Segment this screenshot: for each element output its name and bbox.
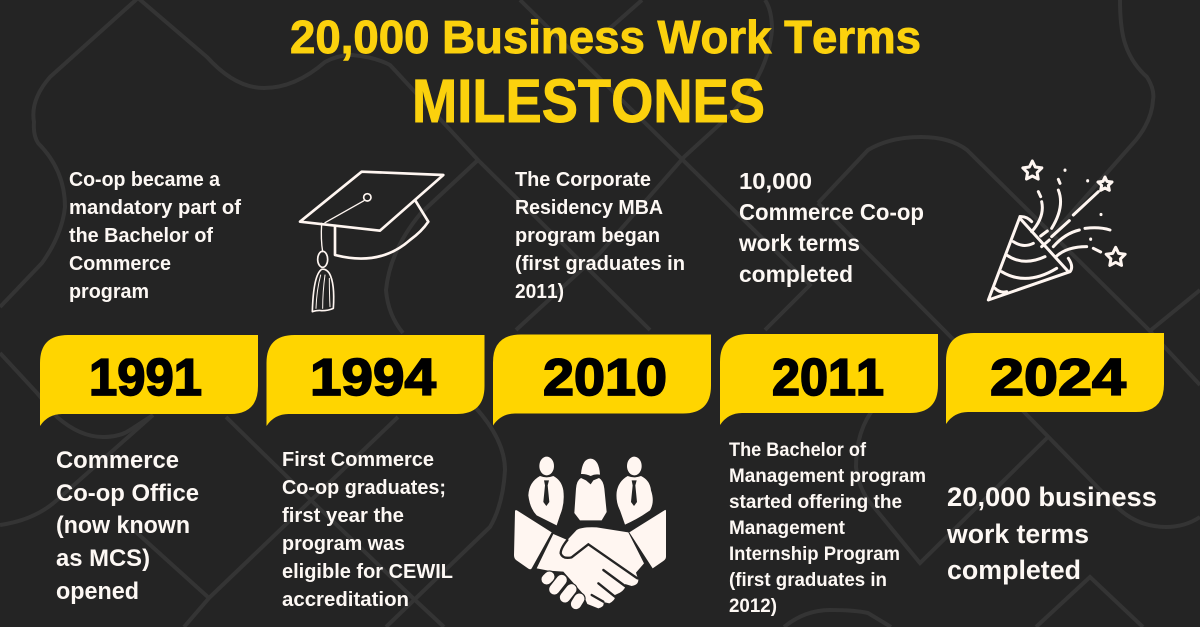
text: 2011 bottom note: Management program <box>729 466 926 487</box>
text: 1991 top note: program <box>69 281 149 303</box>
text: 1994 bottom note: first year the <box>282 505 404 527</box>
text: 2010 top note: Residency MBA <box>515 197 663 219</box>
text: 2011 top note: 10,000 <box>739 168 812 194</box>
text: 1994 bottom note <box>282 449 453 611</box>
text: 1991 top note <box>69 169 241 303</box>
banner: 1994 <box>266 335 484 426</box>
icon: party popper <box>988 161 1125 300</box>
text: 1991 bottom note: (now known <box>56 512 190 539</box>
banner: 2011 <box>720 334 938 425</box>
text: 2024 bottom note: completed <box>947 555 1081 585</box>
text: 2011 top note: Commerce Co-op <box>739 199 924 225</box>
text: 2024 bottom note <box>946 482 1157 585</box>
banner: 2010: 2010 <box>543 349 667 407</box>
text: 2011 bottom note: (first graduates in <box>729 570 887 591</box>
icon part: handshake <box>514 510 666 608</box>
text: 1991 bottom note: Commerce <box>56 447 179 474</box>
text: 1991 bottom note: Co-op Office <box>56 480 199 507</box>
icon: graduation cap <box>300 172 443 312</box>
text: 2011 bottom note: started offering the <box>729 492 902 513</box>
text: 2011 bottom note: Management <box>729 518 846 539</box>
heading: MILESTONES: MILESTONES <box>412 67 765 135</box>
icon part: three business people <box>528 457 653 525</box>
text: 2011 top note <box>738 168 924 287</box>
banner: 2024 <box>946 333 1164 424</box>
text: 2010 top note: program began <box>515 225 660 247</box>
text: 2011 bottom note: Internship Program <box>729 544 900 565</box>
banner: 2011: 2011 <box>772 349 884 407</box>
text: 1991 top note: the Bachelor of <box>69 225 213 247</box>
title <box>290 11 921 135</box>
icon: business handshake with three people <box>514 457 666 608</box>
banner: 1991: 1991 <box>89 349 202 407</box>
text: 1994 bottom note: Co-op graduates; <box>282 477 446 499</box>
text: 2011 bottom note <box>729 440 926 617</box>
banner: 2010 <box>493 334 711 426</box>
text: 2024 bottom note: work terms <box>946 519 1089 549</box>
text: 2024 bottom note: 20,000 business <box>947 482 1157 512</box>
text: 1994 bottom note: eligible for CEWIL <box>282 561 453 583</box>
banner: 2024: 2024 <box>990 349 1126 407</box>
banner: 1991 <box>40 335 258 426</box>
text: 1991 bottom note: as MCS) <box>56 545 150 572</box>
text: 2011 bottom note: The Bachelor of <box>729 440 867 461</box>
heading: 20,000 Business Work Terms: 20,000 Business Work Terms <box>290 11 921 63</box>
text: 1994 bottom note: First Commerce <box>282 449 434 471</box>
text: 2010 top note <box>515 169 685 303</box>
text: 1991 top note: Commerce <box>69 253 171 275</box>
text: 1994 bottom note: program was <box>282 533 405 555</box>
text: 2010 top note: 2011) <box>515 281 564 303</box>
text: 2011 top note: work terms <box>738 230 860 256</box>
text: 1991 top note: mandatory part of <box>69 197 241 219</box>
text: 1991 bottom note: opened <box>56 578 139 605</box>
text: 2011 top note: completed <box>739 261 853 287</box>
text: 2010 top note: The Corporate <box>515 169 651 191</box>
text: 2011 bottom note: 2012) <box>729 596 777 617</box>
text: 1991 bottom note <box>56 447 199 605</box>
banner: 1994: 1994 <box>310 349 436 407</box>
text: 1994 bottom note: accreditation <box>282 589 409 611</box>
text: 1991 top note: Co-op became a <box>69 169 221 191</box>
text: 2010 top note: (first graduates in <box>515 253 685 275</box>
